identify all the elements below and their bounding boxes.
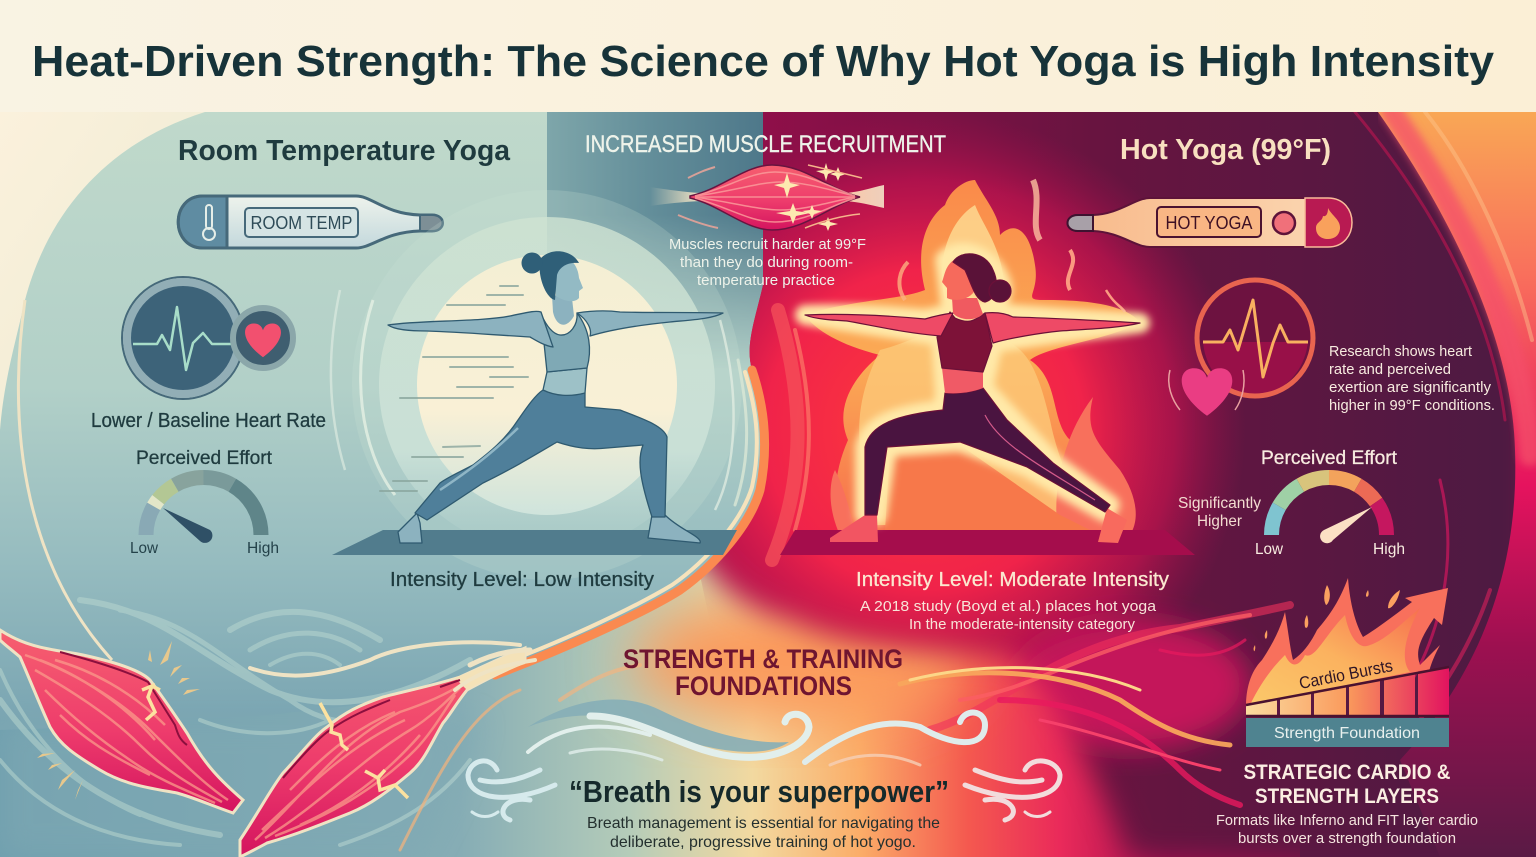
divider flowing ribbons bbox=[490, 310, 809, 700]
glow disc behind cool figure bbox=[331, 190, 742, 580]
gauge: high perceived effort: High bbox=[1373, 541, 1405, 558]
heading: strategic cardio and strength layers bbox=[1244, 761, 1450, 808]
text: heart rate research: rate and perceived bbox=[1329, 361, 1451, 378]
icon: baseline heart monitor bbox=[122, 277, 293, 399]
gauge: high perceived effort bbox=[1255, 477, 1405, 558]
label: heart rate: Lower / Baseline Heart Rate bbox=[91, 410, 326, 432]
heading: strength and training foundations: STRENGTH & TRAINING bbox=[623, 644, 903, 674]
text: muscle recruitment description: Muscles recruit harder at 99°F bbox=[669, 237, 866, 253]
text: heart rate research: Research shows heart bbox=[1329, 343, 1473, 360]
label: intensity moderate: Intensity Level: Moderate Intensity bbox=[856, 569, 1169, 591]
text: formats description: bursts over a strength foundation bbox=[1238, 830, 1456, 847]
panel: room temperature yoga bbox=[91, 135, 511, 557]
text: study citation: A 2018 study (Boyd et al.) places hot yoga bbox=[860, 599, 1157, 615]
label: perceived effort: Perceived Effort bbox=[136, 447, 273, 469]
gauge: low perceived effort: Low bbox=[130, 540, 158, 557]
text: heart rate research: higher in 99°F conditions. bbox=[1329, 397, 1495, 414]
muscle tendon flows bbox=[250, 642, 535, 850]
chart: cardio bursts over strength foundation bbox=[1246, 578, 1449, 747]
label: significantly higher bbox=[1178, 495, 1261, 530]
gauge: low perceived effort: High bbox=[247, 540, 279, 557]
text: heart rate research bbox=[1329, 343, 1495, 414]
text: heart rate research: exertion are significantly bbox=[1329, 379, 1491, 396]
panel: strength and training foundations bbox=[468, 644, 1060, 851]
text: muscle recruitment description bbox=[669, 237, 866, 289]
heading: strength and training foundations: FOUNDATIONS bbox=[675, 671, 852, 701]
heading: room temperature yoga: Room Temperature Yoga bbox=[178, 135, 511, 167]
panel: hot yoga bbox=[856, 134, 1495, 633]
label: significantly higher: Significantly bbox=[1178, 495, 1261, 512]
label: strength foundation: Strength Foundation bbox=[1274, 725, 1420, 742]
heading: strategic cardio and strength layers: STRATEGIC CARDIO & bbox=[1244, 761, 1450, 784]
heading: hot yoga: Hot Yoga (99°F) bbox=[1120, 134, 1331, 166]
icon: right muscle bbox=[240, 648, 525, 857]
icon: elevated heart monitor bbox=[1169, 280, 1313, 416]
panel: strategic cardio and strength layers bbox=[1216, 578, 1478, 847]
figure: room-temperature warrior pose bbox=[332, 251, 737, 555]
label: room temp: ROOM TEMP bbox=[250, 212, 352, 233]
title: Heat-Driven Strength: The Science of Why Hot Yoga is High Intensity bbox=[32, 37, 1495, 86]
text: breath management: Breath management is essential for navigating the bbox=[587, 815, 940, 832]
heading: strategic cardio and strength layers: STRENGTH LAYERS bbox=[1255, 785, 1439, 808]
label: intensity low: Intensity Level: Low Intensity bbox=[390, 569, 654, 591]
figure: hot warrior pose bbox=[780, 253, 1195, 555]
label: cardio bursts: Cardio Bursts bbox=[1297, 656, 1394, 693]
icon: right breath swirl bbox=[965, 761, 1060, 820]
heading: strength and training foundations bbox=[623, 644, 903, 701]
label: perceived effort hot: Perceived Effort bbox=[1261, 447, 1398, 469]
bar steps bbox=[1246, 667, 1449, 715]
text: breath management: deliberate, progressive training of hot yogo. bbox=[610, 834, 916, 851]
icon: hot thermometer bbox=[1068, 198, 1352, 247]
icon: central breath waves bbox=[528, 699, 985, 765]
text: muscle recruitment description: than they do during room- bbox=[680, 255, 853, 271]
title band background bbox=[0, 0, 1536, 112]
text: muscle recruitment description: temperature practice bbox=[697, 273, 835, 289]
right edge flowing pink ribbons bbox=[1355, 112, 1532, 720]
text: formats description bbox=[1216, 812, 1478, 847]
label: significantly higher: Higher bbox=[1197, 513, 1243, 530]
text: breath management bbox=[587, 815, 940, 851]
panel: increased muscle recruitment bbox=[585, 131, 946, 289]
icon: left breath swirl bbox=[468, 761, 555, 820]
figure: hot flames bbox=[805, 180, 1140, 545]
text: study citation bbox=[860, 599, 1157, 633]
background: left wave lines bbox=[0, 600, 470, 845]
yoga mat: hot bbox=[780, 530, 1195, 555]
icon: muscle fibre bbox=[650, 163, 884, 231]
heading: muscle recruitment: INCREASED MUSCLE RECRUITMENT bbox=[585, 131, 946, 158]
left cream flow line bbox=[18, 300, 112, 660]
icon: left muscle bbox=[0, 630, 243, 813]
background: hot flow streaks bbox=[900, 605, 1290, 805]
gauge: low perceived effort bbox=[130, 478, 279, 557]
text: study citation: In the moderate-intensity category bbox=[909, 617, 1136, 633]
gauge: high perceived effort: Low bbox=[1255, 541, 1283, 558]
yoga mat: cool bbox=[332, 530, 737, 555]
label: hot yoga: HOT YOGA bbox=[1166, 212, 1253, 233]
quote: breath is your superpower: “Breath is your superpower” bbox=[569, 774, 949, 809]
icon: room thermometer bbox=[178, 196, 442, 248]
text: formats description: Formats like Inferno and FIT layer cardio bbox=[1216, 812, 1478, 829]
figure: speed lines bbox=[380, 286, 528, 491]
